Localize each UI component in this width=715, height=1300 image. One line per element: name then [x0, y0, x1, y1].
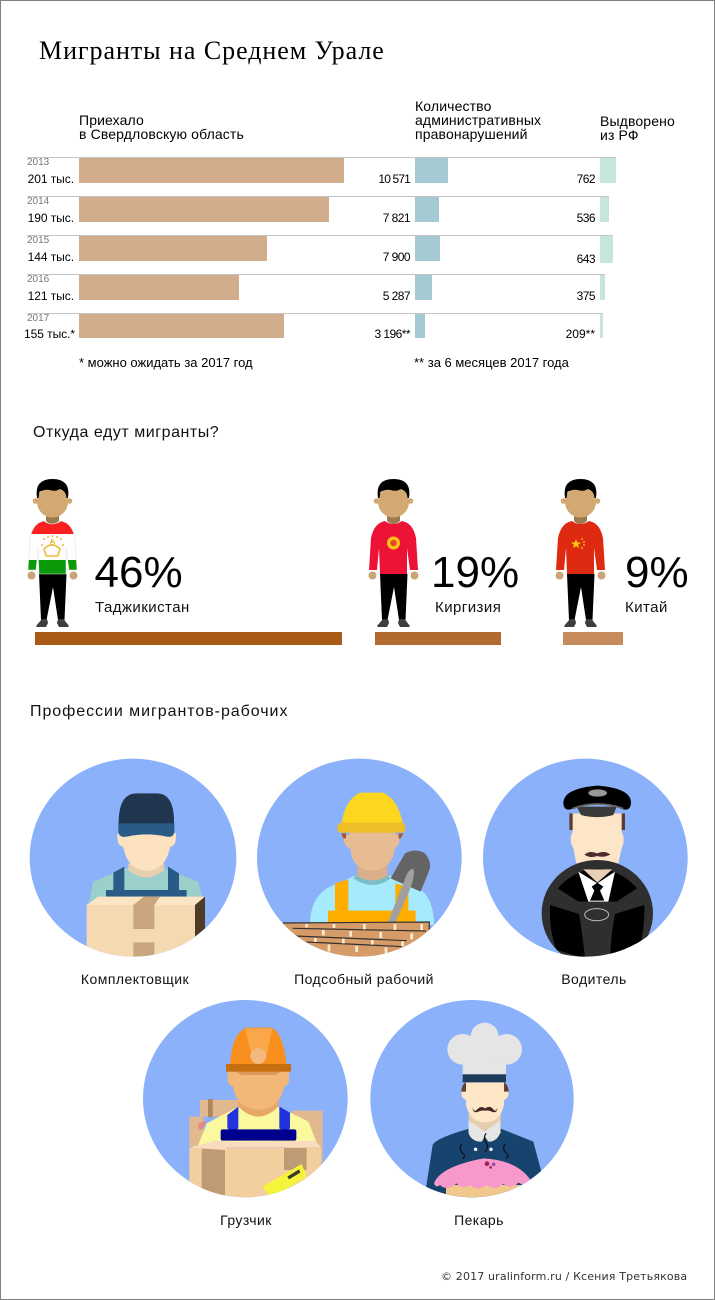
icon: driver: [483, 759, 688, 967]
share bar: [563, 632, 623, 645]
row 2015: 2015: [27, 235, 50, 246]
row 2013: [27, 157, 616, 186]
label: Грузчик: [220, 1212, 272, 1228]
icon: person in Chinese flag shirt: [556, 479, 606, 627]
title: Мигранты на Среднем Урале: [39, 36, 385, 65]
country: China: [556, 479, 689, 645]
row 2015: 7 900: [383, 250, 411, 264]
row 2016: 5 287: [383, 289, 411, 303]
country: Kyrgyzstan: [368, 479, 519, 645]
footnote: arrivals: * можно ожидать за 2017 год: [79, 355, 253, 370]
row 2014: 536: [577, 211, 596, 225]
column heading: deported: из РФ: [600, 127, 639, 143]
row 2017: 2017: [27, 313, 50, 324]
column heading: offences: административных: [415, 112, 541, 128]
footer credit: © 2017 uralinform.ru / Ксения Третьякова: [441, 1270, 687, 1283]
country label: Киргизия: [435, 599, 501, 616]
row 2015: 144 тыс.: [28, 250, 74, 264]
row 2013: 762: [577, 172, 596, 186]
column heading: offences: правонарушений: [415, 126, 528, 142]
share bar: [35, 632, 342, 645]
column heading: arrivals: в Свердловскую область: [79, 126, 244, 142]
row 2015: 643: [577, 252, 596, 266]
row 2016: [27, 274, 605, 303]
percent: 19%: [431, 548, 519, 597]
row 2017: 155 тыс.*: [24, 327, 75, 341]
heading: professions: Профессии мигрантов-рабочих: [30, 703, 288, 720]
icon: person in Kyrgyz flag shirt: [368, 479, 418, 627]
label: Комплектовщик: [81, 971, 190, 987]
row 2016: 121 тыс.: [28, 289, 74, 303]
row 2017: 209**: [566, 327, 595, 341]
row 2014: 190 тыс.: [28, 211, 74, 225]
row 2015: [27, 235, 613, 266]
row 2014: [27, 196, 609, 225]
icon: general labourer: [257, 759, 462, 963]
label: Водитель: [561, 971, 627, 987]
icon: order picker: [30, 759, 236, 963]
row 2017: 3 196**: [374, 327, 411, 341]
footnote: offences: ** за 6 месяцев 2017 года: [414, 355, 570, 370]
column heading: offences: Количество: [415, 98, 492, 114]
row 2016: 375: [577, 289, 596, 303]
label: Пекарь: [454, 1212, 504, 1228]
table: yearly statistics: [24, 98, 675, 370]
icon: baker: [370, 1000, 574, 1203]
heading: origins: Откуда едут мигранты?: [33, 424, 219, 441]
row 2013: 201 тыс.: [28, 172, 74, 186]
row 2017: [24, 313, 603, 341]
column heading: deported: Выдворено: [600, 113, 675, 129]
icon: person in Tajik flag shirt: [25, 479, 80, 627]
row 2013: 2013: [27, 157, 50, 168]
row 2014: 2014: [27, 196, 50, 207]
percent: 46%: [94, 548, 183, 597]
row 2016: 2016: [27, 274, 50, 285]
column heading: arrivals: Приехало: [79, 112, 144, 128]
country label: Китай: [625, 599, 668, 616]
icon: loader: [143, 1000, 348, 1203]
country: Tajikistan: [25, 479, 342, 645]
percent: 9%: [625, 548, 689, 597]
row 2013: 10 571: [378, 172, 411, 186]
country label: Таджикистан: [95, 599, 190, 616]
row 2014: 7 821: [383, 211, 411, 225]
share bar: [375, 632, 501, 645]
label: Подсобный рабочий: [294, 971, 434, 987]
